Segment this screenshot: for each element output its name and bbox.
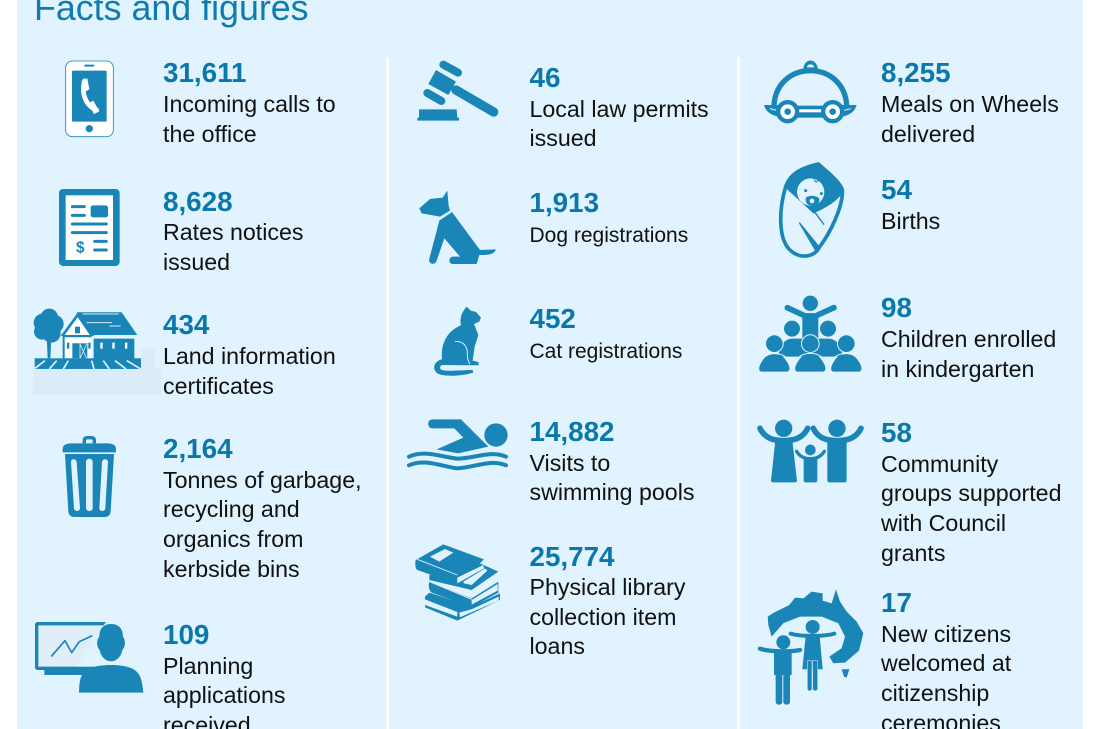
- label: groups supported: [881, 480, 1061, 506]
- number: 434: [163, 309, 210, 340]
- number: 1,913: [530, 187, 599, 218]
- icon: farmhouse: [33, 309, 161, 395]
- label: Community: [881, 451, 999, 477]
- label: New citizens: [881, 621, 1011, 647]
- label: Cat registrations: [530, 340, 682, 363]
- stat: births: [781, 163, 940, 256]
- icon: cloche on wheels: [764, 60, 857, 123]
- label: the office: [163, 121, 257, 147]
- icon: gavel: [417, 65, 494, 121]
- label: Planning: [163, 653, 253, 679]
- label: Visits to: [530, 450, 610, 476]
- icon: rates notice: $: [76, 239, 85, 256]
- stat: dog registrations: [419, 187, 688, 264]
- icon: family with raised arms: [760, 420, 861, 482]
- stat: incoming calls: [66, 57, 336, 147]
- stat: land information: [33, 309, 336, 399]
- number: 31,611: [163, 57, 246, 88]
- stat: swimming pool visits: [409, 416, 694, 505]
- label: applications: [163, 682, 285, 708]
- icon: person at chart screen: [37, 620, 143, 693]
- label: grants: [881, 540, 945, 566]
- stat: community groups: [760, 417, 1061, 566]
- number: 2,164: [163, 433, 233, 464]
- label: issued: [163, 249, 230, 275]
- label: Births: [881, 208, 940, 234]
- label: collection item: [530, 604, 676, 630]
- label: Physical library: [530, 574, 686, 600]
- icon: rates notice: [59, 189, 120, 266]
- label: issued: [530, 125, 597, 151]
- icon: dog: [419, 191, 496, 264]
- stat: cat registrations: [434, 303, 682, 376]
- icon: swaddled baby: [781, 163, 843, 256]
- stat: planning applications: [37, 619, 285, 729]
- label: citizenship: [881, 680, 989, 706]
- icon: group of children: [759, 296, 861, 372]
- number: 58: [881, 417, 912, 448]
- column divider left: [386, 57, 389, 729]
- stat: kindergarten children: [759, 292, 1056, 382]
- icon: rubbish bin: [63, 436, 116, 517]
- icon: swimmer: [409, 419, 508, 468]
- stat: garbage tonnes: [63, 433, 362, 582]
- label: swimming pools: [530, 479, 694, 505]
- label: Incoming calls to: [163, 91, 336, 117]
- icon: smartphone: [66, 61, 113, 137]
- label: delivered: [881, 121, 975, 147]
- number: 8,255: [881, 57, 951, 88]
- number: 25,774: [530, 541, 615, 572]
- number: 46: [530, 62, 560, 93]
- label: welcomed at: [880, 650, 1012, 676]
- number: 109: [163, 619, 209, 650]
- number: 8,628: [163, 186, 233, 217]
- number: 54: [881, 174, 912, 205]
- label: certificates: [163, 373, 274, 399]
- stat: library loans: [415, 541, 686, 659]
- label: with Council: [880, 510, 1006, 536]
- column divider right: [737, 57, 740, 729]
- icon: cat: [434, 307, 481, 376]
- icon: stack of books: [415, 544, 500, 621]
- stat: meals on wheels: [764, 57, 1059, 147]
- label: kerbside bins: [163, 556, 300, 582]
- stat: rates notices: [59, 186, 303, 275]
- label: in kindergarten: [881, 356, 1034, 382]
- icon: people and map of Australia: [760, 589, 863, 705]
- stat: new citizens: [760, 587, 1012, 729]
- label: Tonnes of garbage,: [163, 467, 362, 493]
- label: organics from: [163, 526, 303, 552]
- number: 17: [881, 587, 912, 618]
- label: Dog registrations: [530, 224, 688, 247]
- number: 98: [881, 292, 912, 323]
- number: 452: [530, 303, 576, 334]
- label: Local law permits: [530, 96, 709, 122]
- label: loans: [530, 633, 585, 659]
- number: 14,882: [530, 416, 615, 447]
- label: Land information: [163, 343, 336, 369]
- label: Children enrolled: [881, 326, 1056, 352]
- stat: local law permits: [417, 62, 709, 151]
- label: Meals on Wheels: [881, 91, 1059, 117]
- label: Rates notices: [163, 219, 303, 245]
- label: recycling and: [163, 496, 300, 522]
